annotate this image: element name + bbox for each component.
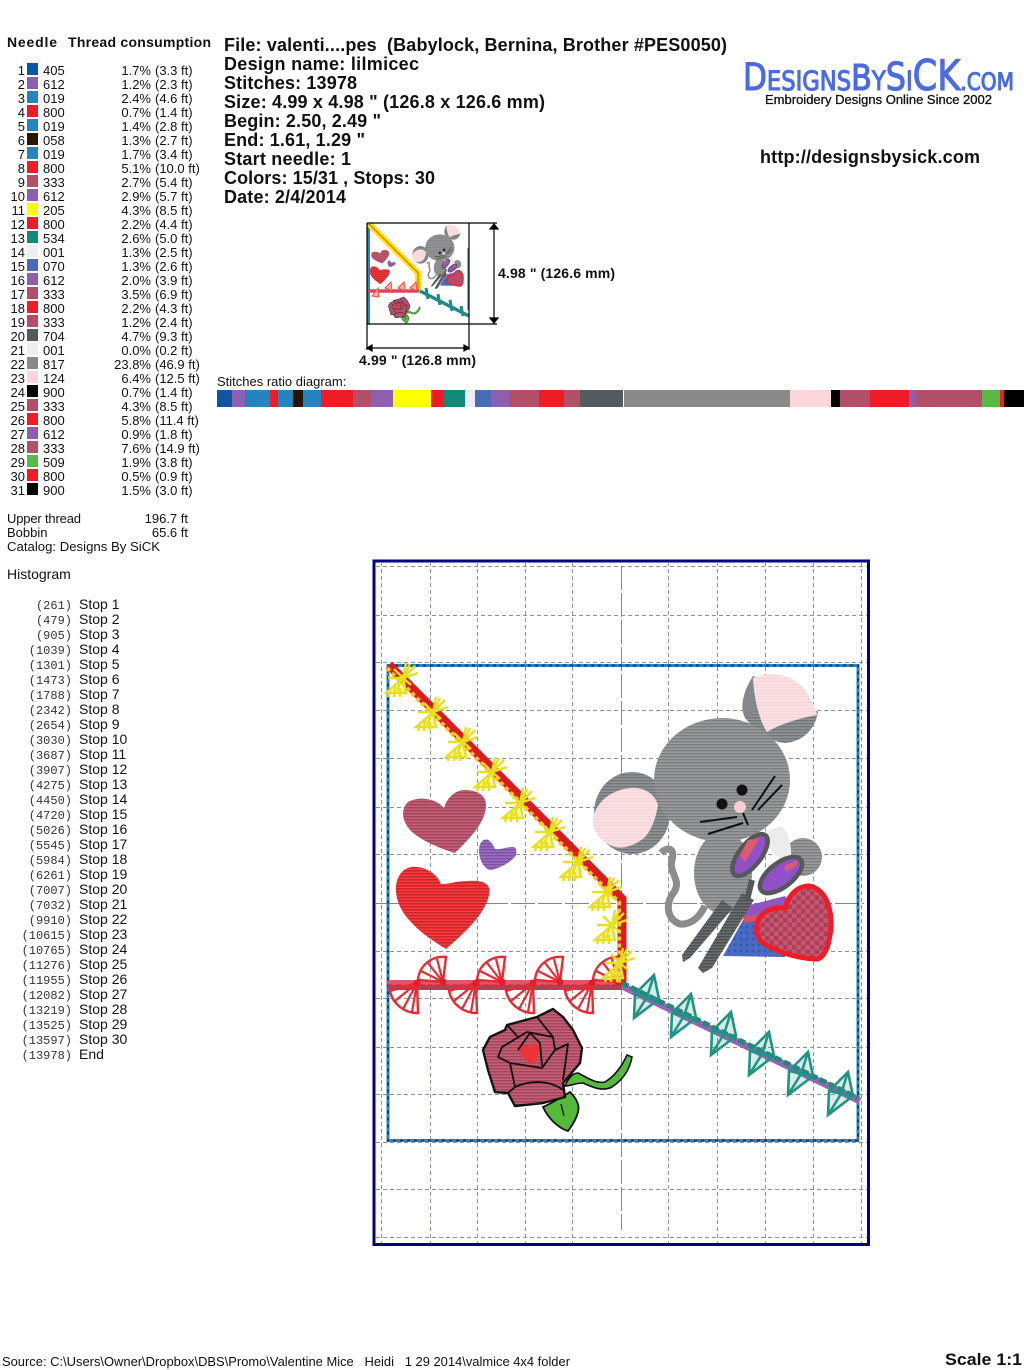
row: needle 4: 4 xyxy=(18,105,25,120)
histogram stop list: (2654) xyxy=(29,719,72,733)
row: needle 27: 27 xyxy=(11,427,25,442)
row: needle 24: 0.7% xyxy=(121,385,151,400)
histogram stop list: Stop 18 xyxy=(79,851,127,867)
row: needle 27: 612 xyxy=(43,427,65,442)
red diagonal band xyxy=(387,665,622,985)
row: needle 11: 205 xyxy=(43,203,65,218)
histogram stop list: Stop 12 xyxy=(79,761,127,777)
row: needle 10: 2.9% xyxy=(121,189,151,204)
row: needle 28: 333 xyxy=(43,441,65,456)
histogram stop list: Stop 8 xyxy=(79,701,120,717)
mouse face xyxy=(700,776,782,834)
histogram stop list: Stop 2 xyxy=(79,611,120,627)
row: needle 30: 800 xyxy=(43,469,65,484)
row: needle 19: (2.4 ft) xyxy=(155,315,193,330)
histogram stop list: (261) xyxy=(36,599,72,613)
design information block: End: 1.61, 1.29 " xyxy=(224,130,365,150)
thread table header: Needle xyxy=(7,34,57,50)
histogram stop list: Stop 26 xyxy=(79,971,127,987)
row: needle 25: (8.5 ft) xyxy=(155,399,193,414)
row: needle 12: 800 xyxy=(43,217,65,232)
design information block: Design name: lilmicec xyxy=(224,54,419,74)
pincushion base xyxy=(723,896,795,957)
row: needle 3: (4.6 ft) xyxy=(155,91,193,106)
histogram stop list: End xyxy=(79,1046,104,1062)
row: needle 8 xyxy=(18,161,200,176)
row: needle 29: 1.9% xyxy=(121,455,151,470)
row: needle 31: (3.0 ft) xyxy=(155,483,193,498)
row: needle 24: (1.4 ft) xyxy=(155,385,193,400)
row: needle 13: 13 xyxy=(11,231,25,246)
row: needle 18: 18 xyxy=(11,301,25,316)
histogram stop list: (3907) xyxy=(29,764,72,778)
row: needle 8: 800 xyxy=(43,161,65,176)
row: needle 1: 405 xyxy=(43,63,65,78)
histogram stop list: Stop 9 xyxy=(79,716,120,732)
row: needle 20: 4.7% xyxy=(121,329,151,344)
histogram stop list: (11276) xyxy=(22,959,72,973)
row: needle 17 xyxy=(11,287,193,302)
panel: stitched design preview xyxy=(374,561,868,1244)
histogram stop list: (4720) xyxy=(29,809,72,823)
histogram stop list: (479) xyxy=(36,614,72,628)
histogram stop list: (12082) xyxy=(22,989,72,1003)
row: needle 17: 3.5% xyxy=(121,287,151,302)
row: needle 25: 25 xyxy=(11,399,25,414)
histogram stop list: (7007) xyxy=(29,884,72,898)
row: needle 3 xyxy=(18,91,193,106)
stitches ratio heading: Stitches ratio diagram: xyxy=(217,374,346,389)
row: needle 14: 1.3% xyxy=(121,245,151,260)
row: needle 25: 4.3% xyxy=(121,399,151,414)
row: needle 14: 001 xyxy=(43,245,65,260)
row: needle 21: 21 xyxy=(11,343,25,358)
histogram stop list: Stop 13 xyxy=(79,776,127,792)
design information block: File: valenti....pes (Babylock, Bernina, Brother #PES0050) xyxy=(224,35,727,55)
row: needle 16 xyxy=(11,273,193,288)
row: needle 18: (4.3 ft) xyxy=(155,301,193,316)
row: needle 16: 16 xyxy=(11,273,25,288)
histogram stop list: Stop 25 xyxy=(79,956,127,972)
histogram stop list: Stop 22 xyxy=(79,911,127,927)
histogram stop list: (1301) xyxy=(29,659,72,673)
row: needle 15 xyxy=(11,259,193,274)
row: needle 20 xyxy=(11,329,193,344)
row: needle 7 xyxy=(18,147,193,162)
rose leaf xyxy=(543,1092,579,1131)
row: needle 13: 2.6% xyxy=(121,231,151,246)
row: needle 2: 2 xyxy=(18,77,25,92)
histogram stop list: Stop 11 xyxy=(79,746,126,762)
row: needle 28 xyxy=(11,441,200,456)
row: needle 10: 612 xyxy=(43,189,65,204)
design information block: Size: 4.99 x 4.98 " (126.8 x 126.6 mm) xyxy=(224,92,545,112)
row: needle 7: (3.4 ft) xyxy=(155,147,193,162)
row: needle 6: (2.7 ft) xyxy=(155,133,193,148)
histogram stop list: Stop 28 xyxy=(79,1001,127,1017)
histogram stop list: (1788) xyxy=(29,689,72,703)
design information block: Date: 2/4/2014 xyxy=(224,187,346,207)
row: needle 10 xyxy=(11,189,193,204)
row: needle 25: 333 xyxy=(43,399,65,414)
row: needle 2 xyxy=(18,77,193,92)
row: needle 22: 22 xyxy=(11,357,25,372)
row: needle 16: 2.0% xyxy=(121,273,151,288)
histogram stop list: Stop 4 xyxy=(79,641,120,657)
row: needle 2: (2.3 ft) xyxy=(155,77,193,92)
histogram stop list: (7032) xyxy=(29,899,72,913)
histogram stop list: (3687) xyxy=(29,749,72,763)
histogram stop list: Stop 21 xyxy=(79,896,127,912)
row: needle 10: 10 xyxy=(11,189,25,204)
row: needle 19: 1.2% xyxy=(121,315,151,330)
row: needle 4: 0.7% xyxy=(121,105,151,120)
design information block xyxy=(224,35,727,207)
histogram stop list: Stop 23 xyxy=(79,926,127,942)
logo: Designs By SiCK: Embroidery Designs Online Since 2002 xyxy=(765,92,992,107)
row: needle 23 xyxy=(11,371,200,386)
heart pincushion xyxy=(756,886,831,959)
row: needle 26 xyxy=(11,413,199,428)
row: needle 26: 26 xyxy=(11,413,25,428)
histogram stop list: (13219) xyxy=(22,1004,72,1018)
row: needle 11: 11 xyxy=(12,203,25,218)
thread totals and catalog xyxy=(7,511,188,554)
row: needle 16: 612 xyxy=(43,273,65,288)
row: needle 15: 070 xyxy=(43,259,65,274)
row: needle 30: 30 xyxy=(11,469,25,484)
row: needle 18 xyxy=(11,301,193,316)
mouse left ear xyxy=(593,772,670,854)
histogram stop list: (2342) xyxy=(29,704,72,718)
row: needle 23: 23 xyxy=(11,371,25,386)
scale label: Scale 1:1 xyxy=(945,1350,1022,1369)
row: needle 24 xyxy=(11,385,193,400)
histogram stop list: (1473) xyxy=(29,674,72,688)
logo: Designs By SiCK: DESIGNSBYSICK.COM xyxy=(743,51,1014,100)
design information block: Start needle: 1 xyxy=(224,149,351,169)
row: needle 13: (5.0 ft) xyxy=(155,231,193,246)
row: needle 21 xyxy=(11,343,193,358)
row: needle 1: 1.7% xyxy=(121,63,151,78)
row: needle 5: (2.8 ft) xyxy=(155,119,193,134)
row: needle 2: 612 xyxy=(43,77,65,92)
row: needle 5: 019 xyxy=(43,119,65,134)
histogram stop list: (13978) xyxy=(22,1049,72,1063)
row: needle 17: 17 xyxy=(11,287,25,302)
row: needle 22: (46.9 ft) xyxy=(155,357,200,372)
histogram stop list: (905) xyxy=(36,629,72,643)
histogram stop list: (5026) xyxy=(29,824,72,838)
histogram heading: Histogram xyxy=(7,566,71,582)
row: needle 17: 333 xyxy=(43,287,65,302)
histogram stop list: (9910) xyxy=(29,914,72,928)
row: needle 4: (1.4 ft) xyxy=(155,105,193,120)
row: needle 11 xyxy=(12,203,193,218)
row: needle 6: 058 xyxy=(43,133,65,148)
row: needle 1 xyxy=(18,63,193,78)
histogram stop list: Stop 29 xyxy=(79,1016,127,1032)
thumbnail: height label: 4.98 " (126.6 mm) xyxy=(498,265,615,281)
row: needle 12: 2.2% xyxy=(121,217,151,232)
histogram stop list: (1039) xyxy=(29,644,72,658)
thread totals and catalog: Bobbin xyxy=(7,525,47,540)
row: needle 20: 20 xyxy=(11,329,25,344)
histogram stop list: (10765) xyxy=(22,944,72,958)
row: needle 9: 2.7% xyxy=(121,175,151,190)
row: needle 12: (4.4 ft) xyxy=(155,217,193,232)
design information block: Stitches: 13978 xyxy=(224,73,357,93)
row: needle 9: 333 xyxy=(43,175,65,190)
histogram stop list: (10615) xyxy=(22,929,72,943)
row: needle 5: 5 xyxy=(18,119,25,134)
row: needle 9: 9 xyxy=(18,175,25,190)
row: needle 6: 1.3% xyxy=(121,133,151,148)
row: needle 9 xyxy=(18,175,193,190)
row: needle 1: 1 xyxy=(18,63,25,78)
thumbnail: stitched border and bands xyxy=(368,224,469,324)
row: needle 6 xyxy=(18,133,193,148)
row: needle 5: 1.4% xyxy=(121,119,151,134)
row: needle 1: (3.3 ft) xyxy=(155,63,193,78)
row: needle 15: (2.6 ft) xyxy=(155,259,193,274)
histogram stop list: (13525) xyxy=(22,1019,72,1033)
row: needle 11: 4.3% xyxy=(121,203,151,218)
row: needle 31: 1.5% xyxy=(121,483,151,498)
row: needle 23: 124 xyxy=(43,371,65,386)
row: needle 22: 817 xyxy=(43,357,65,372)
row: needle 4 xyxy=(18,105,193,120)
row: needle 29: (3.8 ft) xyxy=(155,455,193,470)
row: needle 14: 14 xyxy=(11,245,25,260)
heart: red xyxy=(396,867,489,949)
hearts xyxy=(396,790,516,949)
row: needle 12: 12 xyxy=(11,217,25,232)
thread totals and catalog: 65.6 ft xyxy=(152,525,188,540)
row: needle 28: (14.9 ft) xyxy=(155,441,200,456)
row: needle 7: 1.7% xyxy=(121,147,151,162)
row: needle 18: 2.2% xyxy=(121,301,151,316)
row: needle 22 xyxy=(11,357,200,372)
mouse hand xyxy=(784,838,822,876)
histogram stop list: Stop 30 xyxy=(79,1031,127,1047)
scissors xyxy=(682,829,808,973)
dimension thumbnail xyxy=(359,223,615,368)
row: needle 3: 3 xyxy=(18,91,25,106)
row: needle 20: (9.3 ft) xyxy=(155,329,193,344)
histogram stop list: (13597) xyxy=(22,1034,72,1048)
heart: purple xyxy=(479,839,516,870)
website url: http://designsbysick.com xyxy=(760,147,980,167)
row: needle 17: (6.9 ft) xyxy=(155,287,193,302)
row: needle 23: 6.4% xyxy=(121,371,151,386)
histogram stop list: Stop 7 xyxy=(79,686,120,702)
yellow feather stitches xyxy=(386,663,635,982)
row: needle 7: 019 xyxy=(43,147,65,162)
thread table header: Thread consumption xyxy=(68,34,211,50)
row: needle 2: 1.2% xyxy=(121,77,151,92)
mouse right ear xyxy=(742,674,818,743)
histogram stop list: (5984) xyxy=(29,854,72,868)
thread totals and catalog: Upper thread xyxy=(7,511,81,526)
row: needle 30: (0.9 ft) xyxy=(155,469,193,484)
row: needle 31: 900 xyxy=(43,483,65,498)
histogram stop list: Stop 14 xyxy=(79,791,127,807)
row: needle 24: 24 xyxy=(11,385,25,400)
row: needle 8: 5.1% xyxy=(121,161,151,176)
histogram stop list: Stop 1 xyxy=(79,596,120,612)
row: needle 8: 8 xyxy=(18,161,25,176)
row: needle 30 xyxy=(11,469,193,484)
row: needle 12 xyxy=(11,217,193,232)
source path: Source: C:\Users\Owner\Dropbox\DBS\Promo\Valentine Mice Heidi 1 29 2014\valmice 4x4 folder xyxy=(2,1354,571,1369)
thread consumption table xyxy=(11,63,200,498)
row: needle 21: 0.0% xyxy=(121,343,151,358)
histogram stop list: Stop 17 xyxy=(79,836,127,852)
histogram stop list: (4450) xyxy=(29,794,72,808)
row: needle 5 xyxy=(18,119,193,134)
preview frame background xyxy=(374,561,868,1244)
row: needle 29: 29 xyxy=(11,455,25,470)
row: needle 19: 19 xyxy=(11,315,25,330)
thumbnail: dimension lines xyxy=(367,223,498,351)
thread totals and catalog: Catalog: Designs By SiCK xyxy=(7,539,160,554)
histogram stop list: (5545) xyxy=(29,839,72,853)
design information block: Begin: 2.50, 2.49 " xyxy=(224,111,381,131)
thread totals and catalog: 196.7 ft xyxy=(145,511,188,526)
histogram stop list: (11955) xyxy=(22,974,72,988)
thumbnail: width label: 4.99 " (126.8 mm) xyxy=(359,352,476,368)
row: needle 30: 0.5% xyxy=(121,469,151,484)
row: needle 10: (5.7 ft) xyxy=(155,189,193,204)
row: needle 15: 1.3% xyxy=(121,259,151,274)
row: needle 3: 019 xyxy=(43,91,65,106)
rose-coloured horizontal band xyxy=(388,980,622,990)
histogram stop list: Stop 6 xyxy=(79,671,120,687)
histogram stop list: Stop 3 xyxy=(79,626,120,642)
row: needle 6: 6 xyxy=(18,133,25,148)
row: needle 29: 509 xyxy=(43,455,65,470)
stitches ratio bar xyxy=(217,390,1024,407)
rose stem xyxy=(565,1055,632,1089)
histogram stop list: Stop 19 xyxy=(79,866,127,882)
row: needle 21: 001 xyxy=(43,343,65,358)
rose petals xyxy=(483,1009,582,1106)
mouse body xyxy=(694,832,752,914)
embroidered art xyxy=(386,663,860,1140)
histogram stop list: Stop 10 xyxy=(79,731,127,747)
row: needle 8: (10.0 ft) xyxy=(155,161,200,176)
row: needle 31 xyxy=(11,483,193,498)
row: needle 23: (12.5 ft) xyxy=(155,371,200,386)
row: needle 29 xyxy=(11,455,193,470)
histogram stop list: (4275) xyxy=(29,779,72,793)
row: needle 15: 15 xyxy=(11,259,25,274)
row: needle 27: 0.9% xyxy=(121,427,151,442)
row: needle 21: (0.2 ft) xyxy=(155,343,193,358)
row: needle 28: 7.6% xyxy=(121,441,151,456)
row: needle 19 xyxy=(11,315,193,330)
row: needle 13: 534 xyxy=(43,231,65,246)
histogram stop list: (6261) xyxy=(29,869,72,883)
histogram stop list: Stop 5 xyxy=(79,656,120,672)
mouse figure xyxy=(593,674,831,973)
row: needle 16: (3.9 ft) xyxy=(155,273,193,288)
row: needle 31: 31 xyxy=(11,483,25,498)
histogram stop list: (3030) xyxy=(29,734,72,748)
row: needle 22: 23.8% xyxy=(114,357,151,372)
blue running-stitch border xyxy=(388,666,858,1140)
row: needle 7: 7 xyxy=(18,147,25,162)
design information block: Colors: 15/31 , Stops: 30 xyxy=(224,168,435,188)
row: needle 14: (2.5 ft) xyxy=(155,245,193,260)
row: needle 28: 28 xyxy=(11,441,25,456)
histogram stop list: Stop 24 xyxy=(79,941,127,957)
histogram stop list xyxy=(22,596,127,1063)
row: needle 13 xyxy=(11,231,193,246)
purple and teal diagonal band xyxy=(622,983,860,1101)
row: needle 20: 704 xyxy=(43,329,65,344)
mouse head xyxy=(654,718,790,842)
row: needle 26: (11.4 ft) xyxy=(155,413,199,428)
mouse tail xyxy=(661,849,705,924)
row: needle 11: (8.5 ft) xyxy=(155,203,193,218)
row: needle 27 xyxy=(11,427,193,442)
heart: rose xyxy=(403,790,486,853)
mouse white belly xyxy=(762,826,791,868)
thumbnail: hearts, rose and mouse xyxy=(370,225,463,323)
row: needle 18: 800 xyxy=(43,301,65,316)
row: needle 4: 800 xyxy=(43,105,65,120)
row: needle 25 xyxy=(11,399,193,414)
row: needle 26: 800 xyxy=(43,413,65,428)
rose centre heart xyxy=(520,1043,539,1065)
histogram stop list: Stop 27 xyxy=(79,986,127,1002)
row: needle 26: 5.8% xyxy=(121,413,151,428)
histogram stop list: Stop 15 xyxy=(79,806,127,822)
row: needle 24: 900 xyxy=(43,385,65,400)
red fan stitches xyxy=(390,957,622,1013)
rose flower xyxy=(483,1009,632,1131)
row: needle 27: (1.8 ft) xyxy=(155,427,193,442)
row: needle 9: (5.4 ft) xyxy=(155,175,193,190)
histogram stop list: Stop 16 xyxy=(79,821,127,837)
histogram stop list: Stop 20 xyxy=(79,881,127,897)
row: needle 19: 333 xyxy=(43,315,65,330)
row: needle 14 xyxy=(11,245,193,260)
row: needle 3: 2.4% xyxy=(121,91,151,106)
teal star stitches xyxy=(634,975,853,1115)
